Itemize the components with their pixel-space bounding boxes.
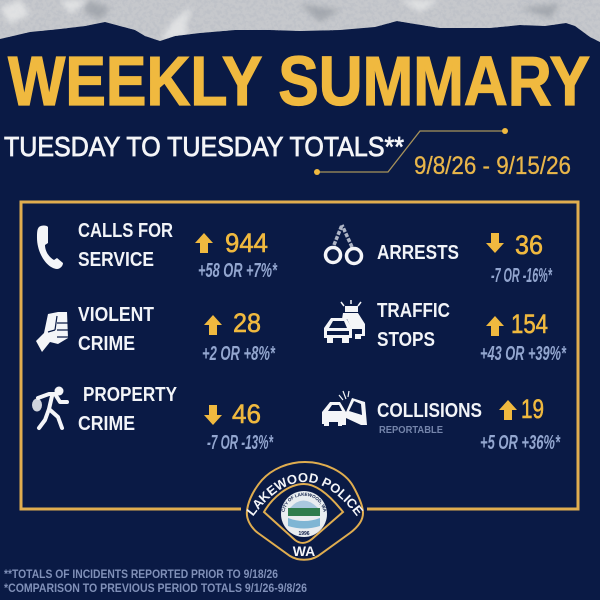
- seal: CITY OF LAKEWOOD, WA: [282, 492, 326, 512]
- stat: traffic stops: [324, 300, 567, 365]
- stat: violent crime: [36, 304, 276, 365]
- stat: collisions: COLLISIONS: [377, 400, 482, 422]
- stat: property crime: PROPERTY: [83, 384, 178, 406]
- icon: handcuffs: [326, 225, 362, 264]
- date range: 9/8/26 - 9/15/26: [414, 152, 571, 180]
- stat: calls for service: CALLS FOR: [78, 220, 173, 242]
- icon: running thief: [32, 386, 67, 428]
- stat: calls for service: [37, 220, 278, 282]
- stat: violent crime: 28: [233, 308, 261, 338]
- footnotes: [4, 569, 307, 595]
- stat: violent crime: +2 OR +8%*: [202, 343, 276, 365]
- stat: calls for service: SERVICE: [78, 249, 154, 271]
- stat: property crime: 46: [232, 399, 261, 429]
- police badge logo: WA: [293, 543, 315, 559]
- icon: phone: [37, 226, 63, 269]
- stat: traffic stops: 154: [511, 309, 548, 339]
- icon: police cars: [324, 300, 365, 343]
- icon: colliding cars: [322, 391, 367, 426]
- stat: collisions: 19: [521, 394, 544, 424]
- stat: collisions: [322, 391, 561, 454]
- seal: [281, 491, 327, 537]
- stat: traffic stops: TRAFFIC: [377, 300, 450, 322]
- police badge logo: [246, 461, 364, 561]
- badge text: LAKEWOOD POLICE: [246, 473, 364, 516]
- stat: arrests: [326, 225, 553, 287]
- stat: calls for service: 944: [225, 228, 268, 258]
- stat: arrests: ARRESTS: [377, 242, 459, 264]
- footnotes: *COMPARISON TO PREVIOUS PERIOD TOTALS 9/1/26-9/8/26: [4, 583, 307, 595]
- date connector line: [314, 128, 508, 175]
- stat: violent crime: CRIME: [78, 333, 135, 355]
- stat: collisions: +5 OR +36%*: [480, 432, 561, 454]
- icon: fist: [36, 312, 68, 352]
- subtitle: TUESDAY TO TUESDAY TOTALS**: [4, 131, 404, 162]
- stat: arrests: 36: [515, 230, 543, 260]
- stat: calls for service: +58 OR +7%*: [198, 260, 278, 282]
- stats frame: [21, 202, 578, 509]
- stat: property crime: [32, 384, 274, 454]
- torn paper header: [0, 0, 600, 42]
- stat: traffic stops: STOPS: [377, 329, 435, 351]
- seal: 1996: [298, 531, 310, 537]
- stat: property crime: -7 OR -13%*: [207, 432, 274, 454]
- stat: property crime: CRIME: [78, 413, 135, 435]
- footnotes: **TOTALS OF INCIDENTS REPORTED PRIOR TO 9/18/26: [4, 569, 278, 581]
- stat: violent crime: VIOLENT: [78, 304, 154, 326]
- reportable note: REPORTABLE: [379, 425, 443, 436]
